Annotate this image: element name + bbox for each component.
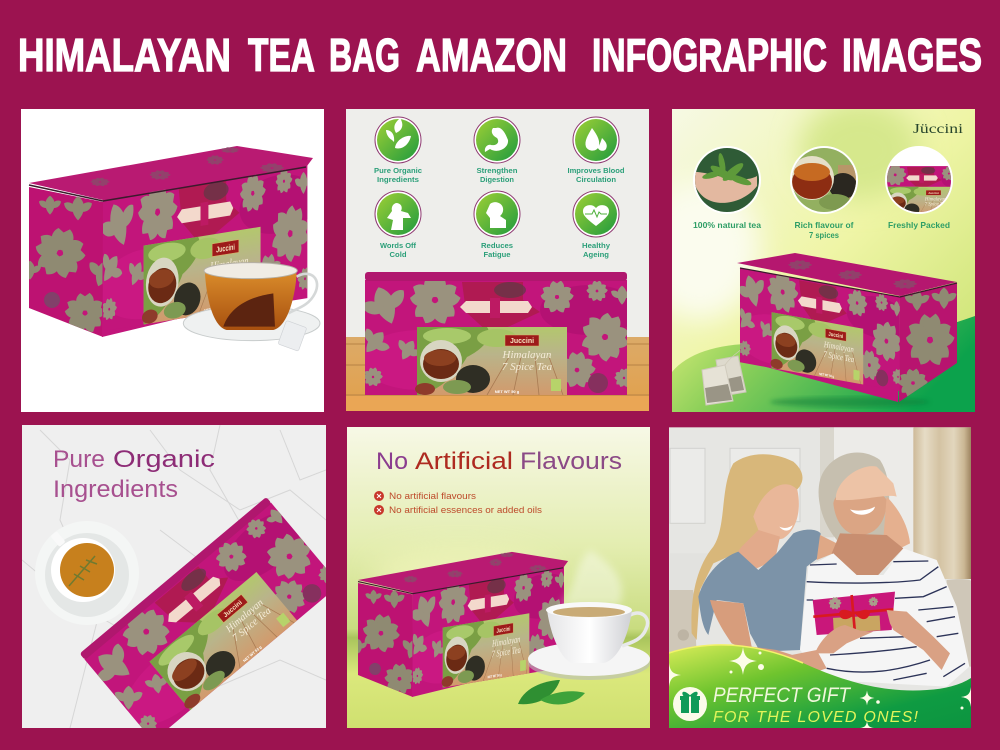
icon: words off cold <box>375 191 421 237</box>
heading: Ingredients <box>53 476 178 503</box>
label: words off cold: Cold <box>390 250 407 259</box>
tea cup top view <box>35 526 129 624</box>
box: floral tea box rotated <box>80 498 326 728</box>
photo: freshly packed box <box>885 146 953 214</box>
caption: rich flavour <box>795 222 854 240</box>
heading: Organic <box>113 446 215 473</box>
caption: natural tea: 100% natural tea <box>693 220 761 230</box>
heading <box>53 446 215 503</box>
heading: Artificial <box>415 448 513 475</box>
box: floral tea box <box>351 552 571 697</box>
label: strengthen digestion: Strengthen <box>476 166 518 175</box>
panel: natural tea features <box>672 109 975 412</box>
label: reduces fatigue: Reduces <box>481 241 513 250</box>
heading: Pure <box>53 446 105 473</box>
panel: no artificial flavours <box>347 427 650 728</box>
gift box <box>813 592 895 635</box>
tea bags <box>702 350 746 406</box>
title: BAG <box>329 29 400 81</box>
label: pure organic ingredients <box>374 168 422 184</box>
banner text <box>713 684 919 726</box>
swoosh highlight <box>669 645 803 663</box>
photo: tea leaves in hand <box>693 146 761 214</box>
caption: freshly packed: Freshly Packed <box>888 220 950 230</box>
icon: strengthen digestion <box>474 117 520 163</box>
label: improves blood circulation: Circulation <box>576 175 616 184</box>
panel: health benefits icons <box>346 109 649 411</box>
label: pure organic ingredients: Ingredients <box>377 175 419 184</box>
title: AMAZON <box>416 29 567 81</box>
panel: perfect gift photo <box>657 427 981 735</box>
label: reduces fatigue <box>482 242 513 258</box>
sofa <box>669 579 971 667</box>
caption: rich flavour: Rich flavour of <box>794 220 854 230</box>
older woman <box>800 453 969 687</box>
box: floral tea box <box>19 146 318 337</box>
green ground swoosh <box>672 316 975 412</box>
steam <box>560 550 622 605</box>
room background <box>669 427 971 729</box>
icon: reduces fatigue <box>474 191 520 237</box>
label: words off cold: Words Off <box>380 241 416 250</box>
label: strengthen digestion <box>476 168 517 184</box>
label: reduces fatigue: Fatigue <box>484 250 510 259</box>
title: INFOGRAPHIC <box>592 29 827 81</box>
hands <box>783 610 950 672</box>
icon: healthy ageing <box>573 191 619 237</box>
panel: product with tea cup <box>19 109 324 412</box>
heading: Flavours <box>520 448 622 475</box>
heading <box>378 452 622 469</box>
younger woman <box>691 454 840 673</box>
label: healthy ageing <box>582 242 610 258</box>
wooden shelf <box>346 337 649 411</box>
label: improves blood circulation: Improves Blood <box>568 166 625 175</box>
label: improves blood circulation <box>568 168 624 182</box>
photo: rich tea with spices <box>790 146 858 214</box>
heading: No <box>376 448 408 475</box>
box: floral tea box angled <box>734 253 957 407</box>
panel: pure organic ingredients <box>22 425 326 728</box>
icon: pure organic ingredients <box>375 117 421 163</box>
caption: rich flavour: 7 spices <box>809 230 839 240</box>
title: TEA <box>248 29 315 81</box>
list: no artificial items: No artificial essences or added oils <box>389 505 542 516</box>
list: no artificial items <box>374 491 542 516</box>
banner text: PERFECT GIFT <box>713 684 852 707</box>
banner text: FOR THE LOVED ONES! <box>713 709 919 726</box>
label: words off cold <box>380 242 416 257</box>
box: floral tea box front view <box>355 272 640 395</box>
label: healthy ageing: Ageing <box>583 250 609 259</box>
title: HIMALAYAN <box>18 29 231 81</box>
brand logo: Jüccini <box>913 122 963 137</box>
icon: improves blood circulation <box>573 117 619 163</box>
title <box>18 29 982 81</box>
sparkles <box>657 647 981 735</box>
list: no artificial items: No artificial flavours <box>389 491 476 502</box>
marble veins <box>22 425 326 728</box>
label: healthy ageing: Healthy <box>582 241 611 250</box>
label: pure organic ingredients: Pure Organic <box>374 166 422 175</box>
green tea leaves <box>518 680 585 704</box>
label: strengthen digestion: Digestion <box>480 175 514 184</box>
icon: gift <box>673 687 707 721</box>
white cup and saucer <box>528 602 650 680</box>
green swoosh banner <box>669 645 971 728</box>
tea cup with saucer <box>183 263 320 351</box>
